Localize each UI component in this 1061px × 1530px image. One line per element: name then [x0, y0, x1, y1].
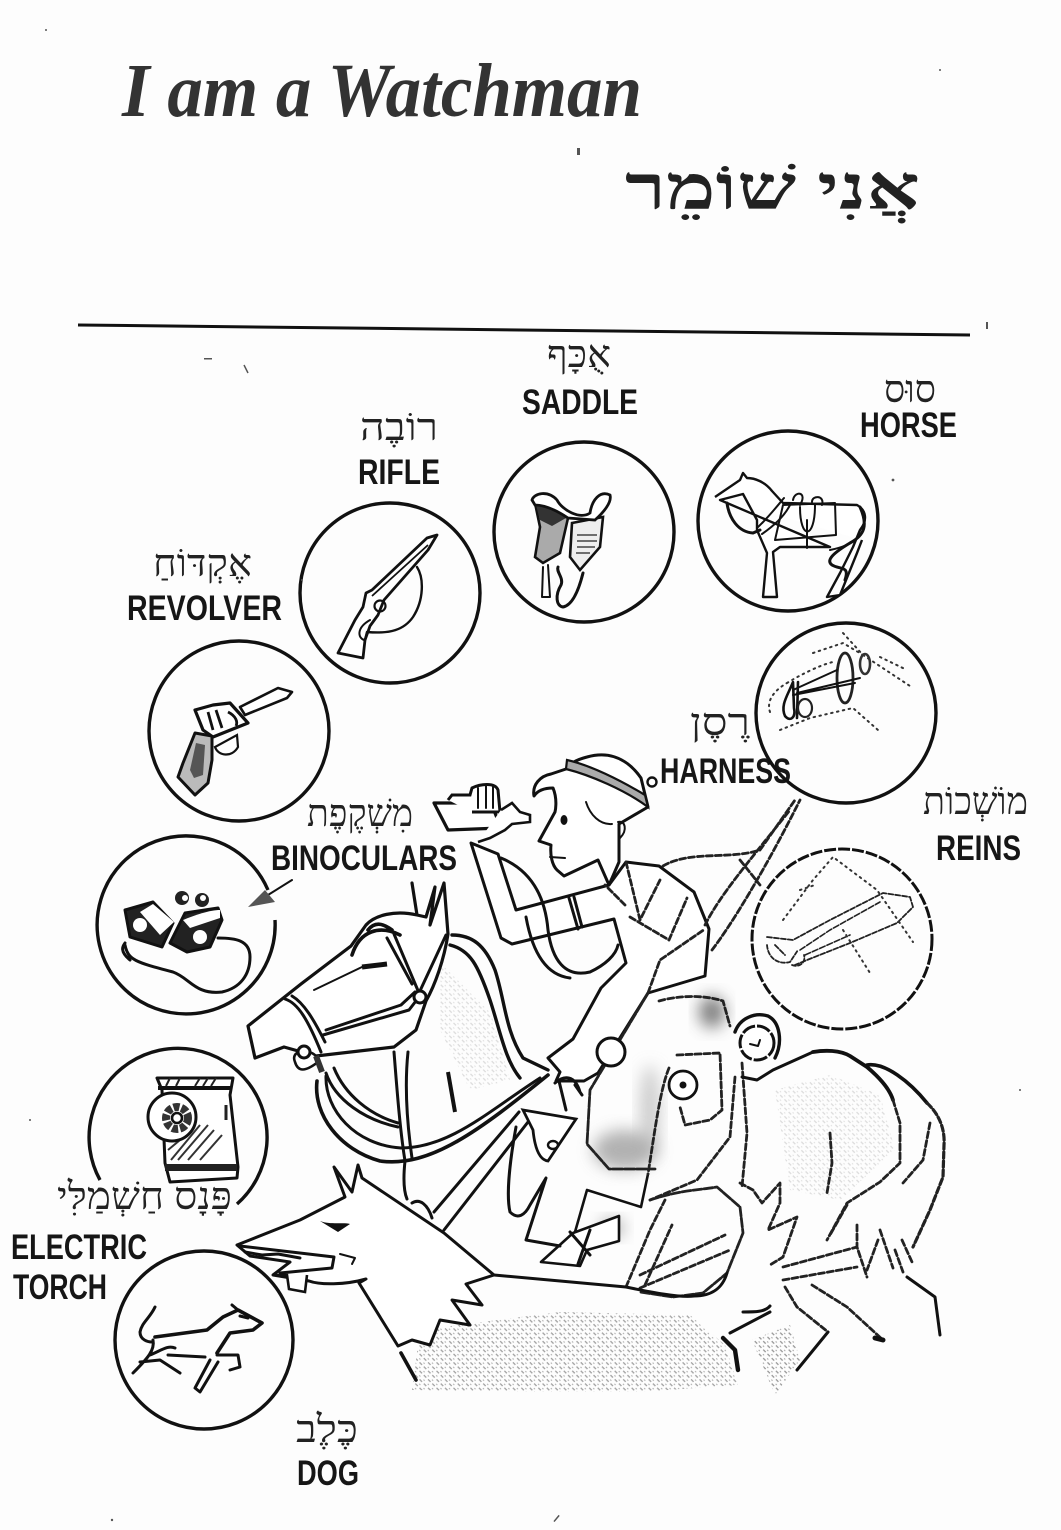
icon: reins dotted	[767, 857, 913, 973]
icon: saddle	[532, 494, 610, 607]
icon: electric torch	[148, 1078, 238, 1182]
label: saddle: אֻכָּף	[547, 334, 611, 376]
panel: rifle	[300, 503, 480, 683]
panel: reins	[752, 849, 932, 1029]
icon: harness dotted head	[769, 633, 913, 730]
knee and lower leg	[640, 1187, 743, 1297]
icon: revolver	[178, 688, 292, 795]
panel: dog	[115, 1251, 293, 1429]
horse rear	[723, 1015, 944, 1370]
horse neck crest	[450, 935, 548, 1078]
harness straps over shoulder	[663, 800, 800, 950]
stippled shading under horse	[412, 1312, 738, 1392]
label: electric torch: פָּנָס חַשְׁמַלִּי	[57, 1176, 232, 1218]
label: electric torch: TORCH	[13, 1268, 107, 1307]
label: revolver: אֶקְדּוֹחַ	[153, 543, 252, 585]
label: reins: מוֹשְׁכוֹת	[923, 781, 1028, 823]
label: binoculars: מִשְׁקֶפֶת	[307, 793, 413, 835]
reins and chest straps	[317, 1052, 548, 1199]
label: dog: DOG	[297, 1454, 359, 1493]
panel: binoculars	[97, 836, 292, 1014]
label: reins: REINS	[936, 829, 1021, 868]
label: saddle	[522, 334, 638, 422]
label: dog: כֶּלֶב	[296, 1409, 358, 1451]
stippled shading between hind legs	[752, 1325, 800, 1395]
label: electric torch: ELECTRIC	[11, 1228, 147, 1267]
label: binoculars	[271, 793, 457, 878]
label: binoculars: BINOCULARS	[271, 839, 457, 878]
rider	[434, 755, 800, 1297]
label: horse	[860, 369, 957, 445]
icon: horse	[715, 473, 865, 597]
panel: torch	[89, 1048, 267, 1204]
label: horse: סוּס	[884, 369, 936, 411]
label: reins	[923, 781, 1028, 868]
label: rifle: RIFLE	[358, 453, 440, 492]
label: revolver	[127, 543, 282, 628]
shaded trousers	[593, 1130, 657, 1170]
horse front	[248, 883, 548, 1230]
shirt dashed lines	[605, 862, 705, 993]
panel: harness	[756, 623, 936, 803]
panel: saddle	[494, 442, 674, 622]
label: revolver: REVOLVER	[127, 589, 282, 628]
boot and bag	[541, 1216, 619, 1266]
label: rifle: רוֹבֶה	[360, 407, 438, 449]
arrow: to binoculars	[248, 880, 292, 907]
icon: rifle	[338, 535, 437, 658]
stippled shading on neck	[440, 960, 510, 1090]
label: dog	[296, 1409, 359, 1493]
label: saddle: SADDLE	[522, 383, 638, 422]
label: harness: רֶסֶן	[690, 702, 750, 744]
label: horse: HORSE	[860, 406, 957, 445]
dog head	[237, 1165, 727, 1380]
label: electric torch	[11, 1176, 232, 1307]
icon: binoculars	[123, 891, 250, 992]
divider rule	[78, 325, 970, 335]
stippled shading on rump	[775, 1075, 895, 1200]
binoculars held	[434, 784, 530, 842]
title: Hebrew: אֲנִי שׁוֹמֵר	[625, 155, 920, 224]
illustration: mounted watchman	[237, 755, 944, 1380]
label: harness	[660, 702, 791, 791]
panel: revolver	[149, 641, 329, 821]
title: English: I am a Watchman	[121, 49, 642, 133]
icon: running dog	[133, 1305, 262, 1392]
panel: horse	[698, 431, 878, 611]
label: rifle	[358, 407, 440, 492]
label: harness: HARNESS	[660, 752, 791, 791]
